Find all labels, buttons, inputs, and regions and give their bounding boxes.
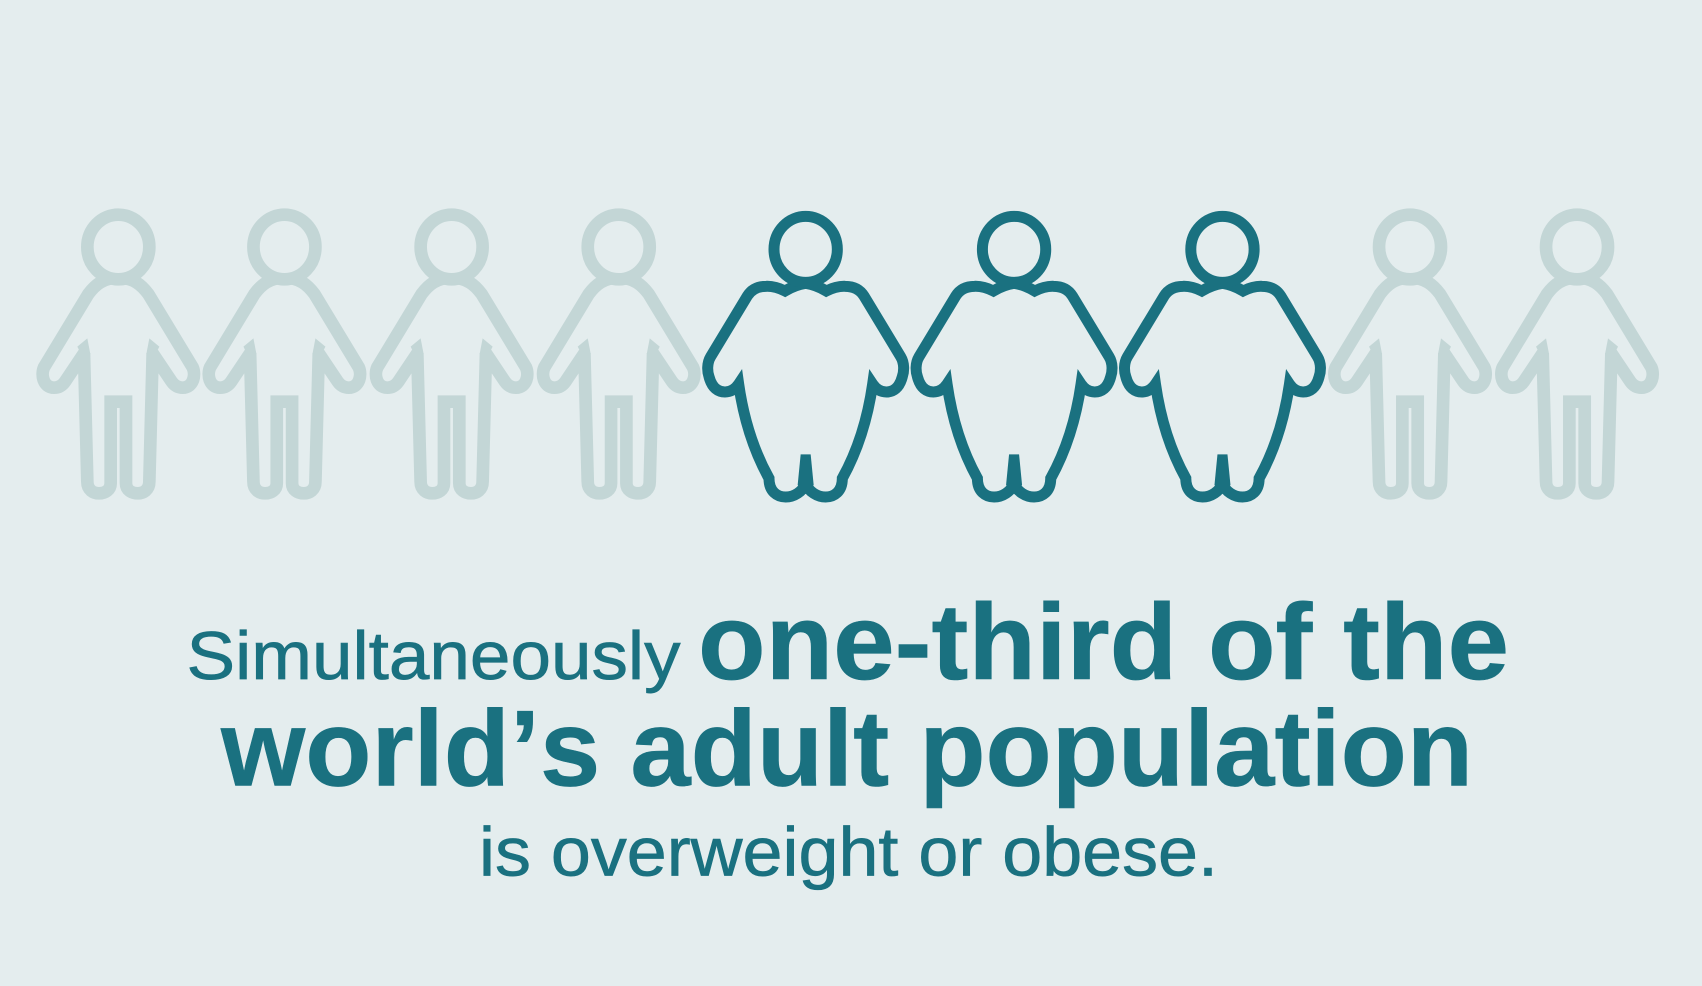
icon: person, overweight 1 [708,216,904,497]
text: emphasis line one: one-third of the [698,581,1509,702]
icon: person, overweight 2 [916,216,1112,497]
pictogram row: nine people [43,215,1653,497]
text: lead-in: Simultaneously [186,618,680,694]
icon: person, normal weight 3 [376,215,527,493]
text: closing line: is overweight or obese. [479,814,1218,890]
text: emphasis line two: world’s adult population [220,688,1473,808]
icon: person, normal weight 1 [43,215,194,493]
icon: person, normal weight 5 [1334,215,1486,493]
headline text block [186,581,1509,890]
icon: person, normal weight 2 [209,215,360,493]
icon: person, normal weight 6 [1501,215,1653,493]
icon: person, overweight 3 [1124,216,1320,497]
icon: person, normal weight 4 [543,215,694,493]
